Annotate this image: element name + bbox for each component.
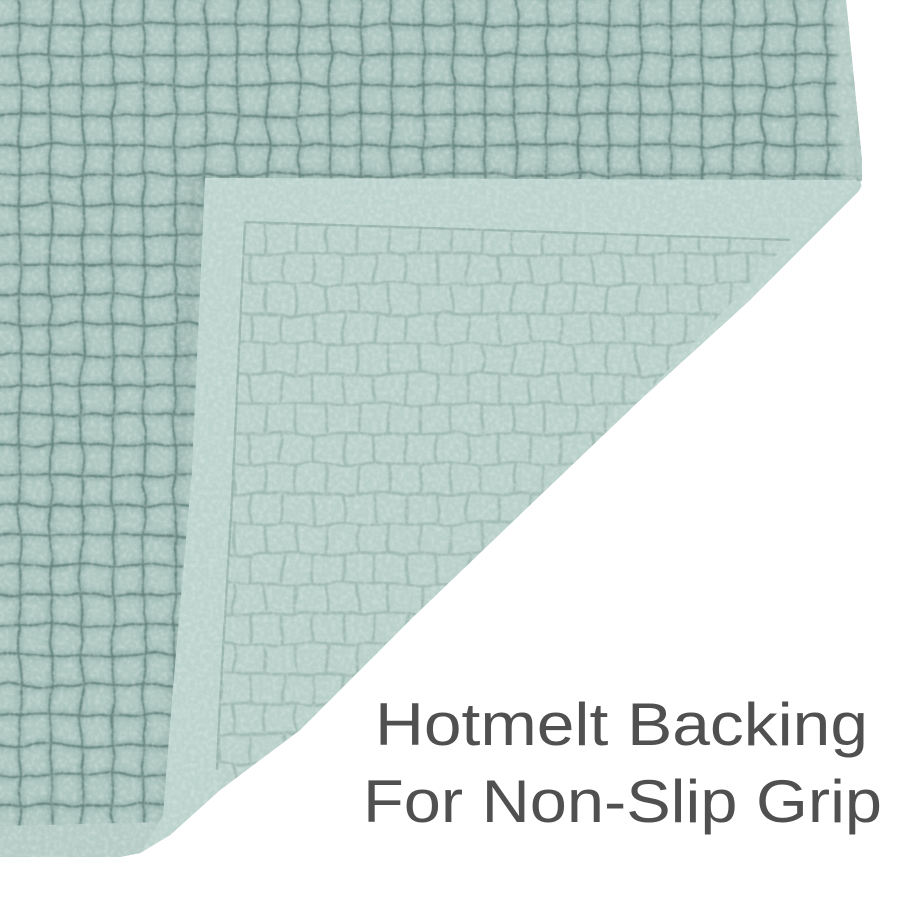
- backing seam: [217, 222, 790, 770]
- mat bottom edge binding: [0, 822, 165, 857]
- panel: folded corner backing: [142, 178, 862, 852]
- caption line 1: Hotmelt Backing: [375, 691, 868, 758]
- mat right edge binding: [834, 0, 866, 180]
- caption line 2: For Non-Slip Grip: [363, 768, 882, 835]
- backing grid cells: [218, 224, 778, 779]
- fold shadow: [160, 178, 202, 818]
- caption: hotmelt backing: [363, 691, 882, 835]
